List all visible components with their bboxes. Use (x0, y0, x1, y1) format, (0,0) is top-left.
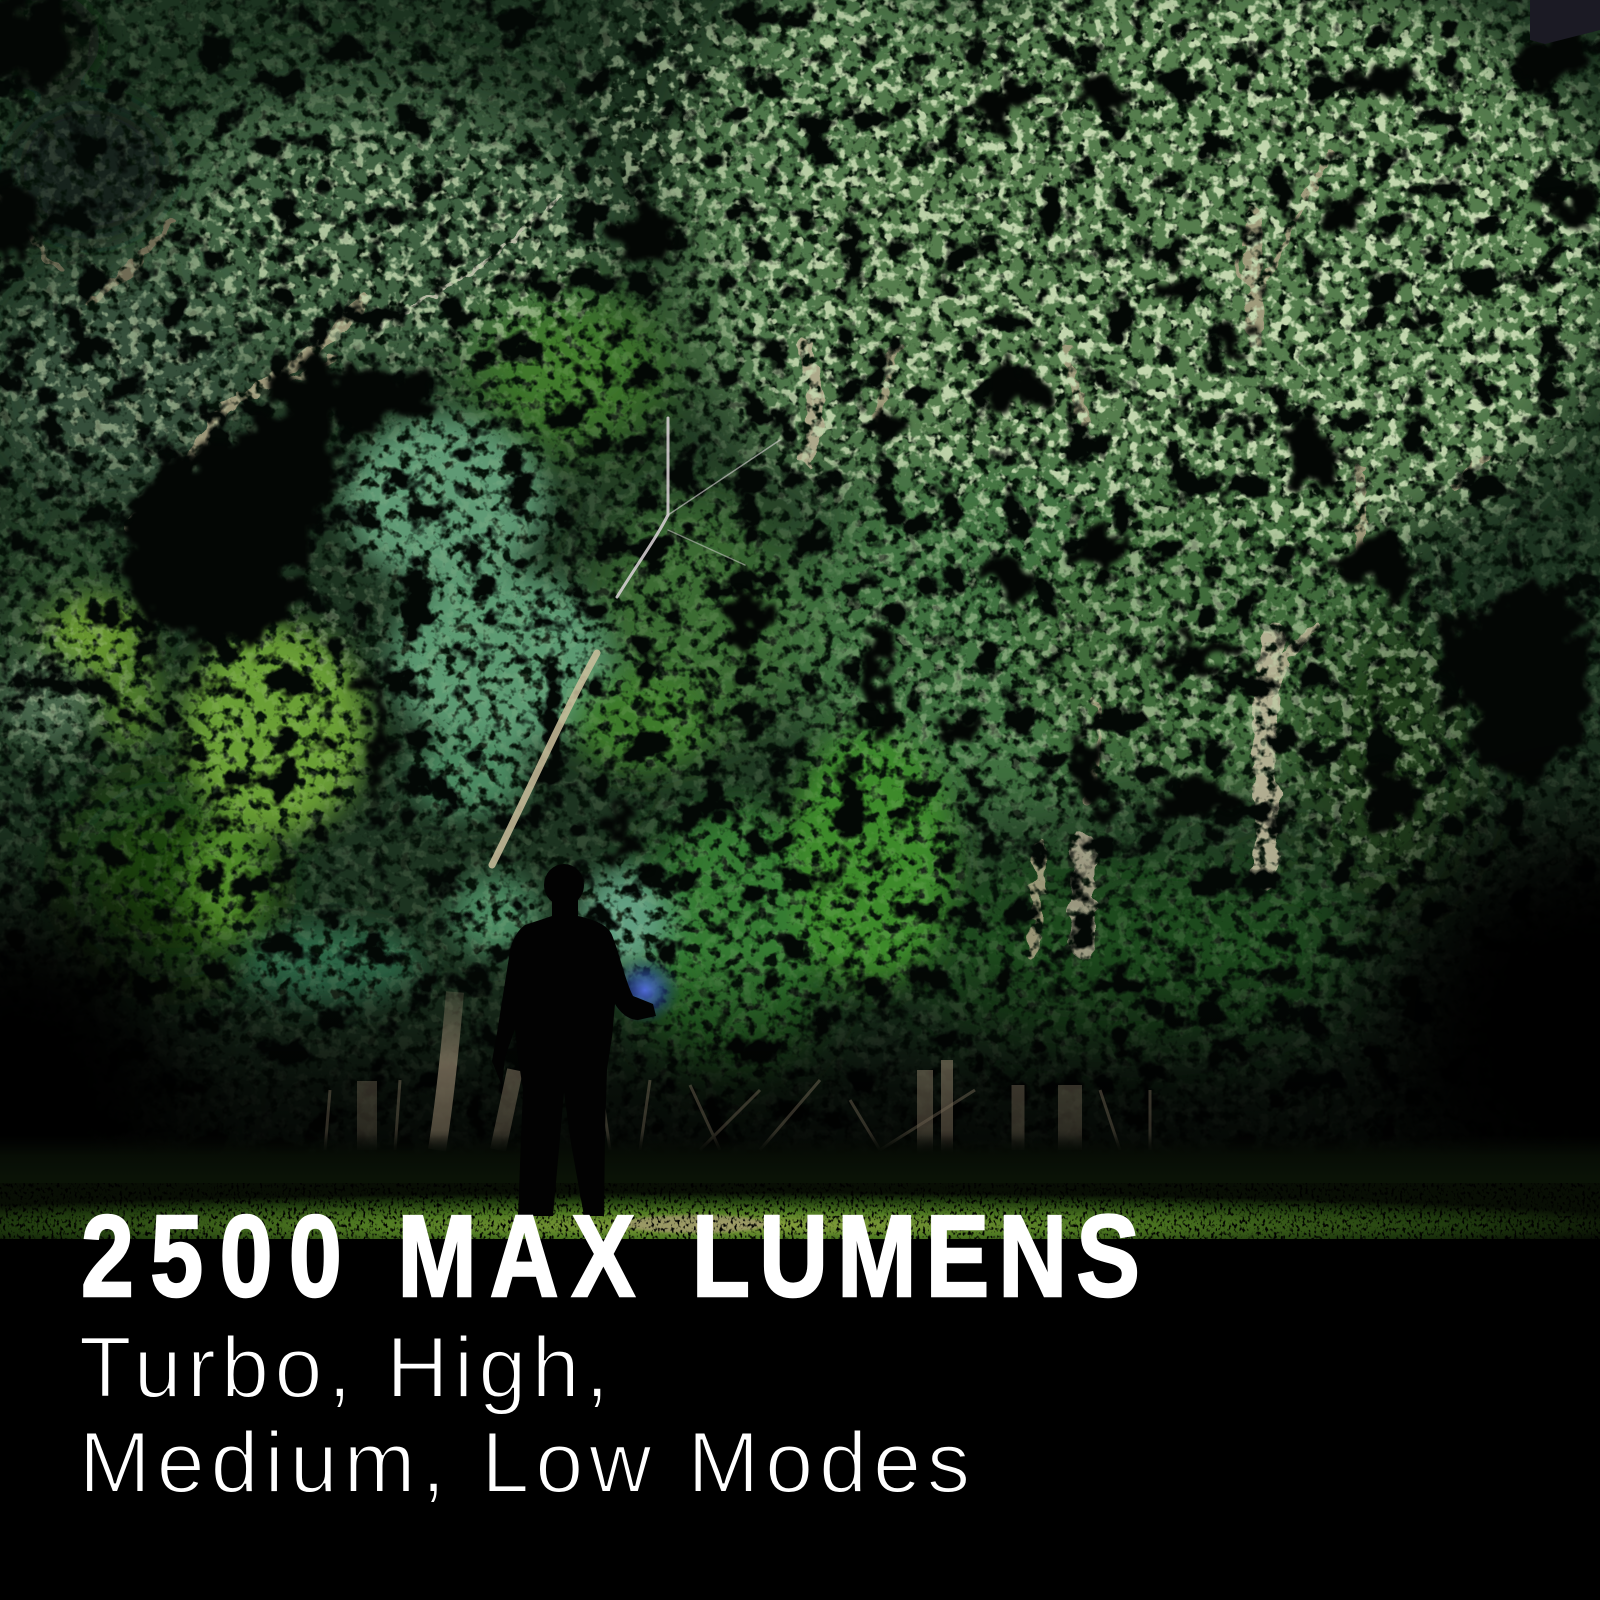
flashlight glow (609, 956, 681, 1024)
foreground pale branches (492, 418, 780, 865)
leaf gap texture (0, 0, 1600, 1250)
sky corner (1530, 0, 1600, 44)
tree trunks and branches (0, 153, 1484, 950)
leaf shadow texture (0, 0, 1600, 1250)
heading: 2500 (81, 1192, 358, 1321)
black lower panel (0, 1239, 1600, 1600)
subheading line 2: Medium, Low Modes (79, 1415, 970, 1511)
heading: MAX (398, 1192, 648, 1321)
photo: illuminated forest canopy (0, 0, 1600, 1239)
foliage colour field (0, 0, 1600, 1080)
dark gaps between the trees (0, 0, 1594, 878)
fade of forest into darkness (0, 950, 1600, 1200)
leaf highlight texture (0, 0, 1600, 1080)
silhouette of person holding flashlight (492, 864, 656, 1216)
lit foliage: yellow green shrub and teal tree (0, 0, 955, 1030)
subheading (79, 1320, 970, 1511)
lower trunks (325, 992, 1150, 1155)
heading: LUMENS (692, 1192, 1149, 1321)
subheading line 1: Turbo, High, (79, 1320, 609, 1416)
grass strip (0, 1135, 1600, 1239)
